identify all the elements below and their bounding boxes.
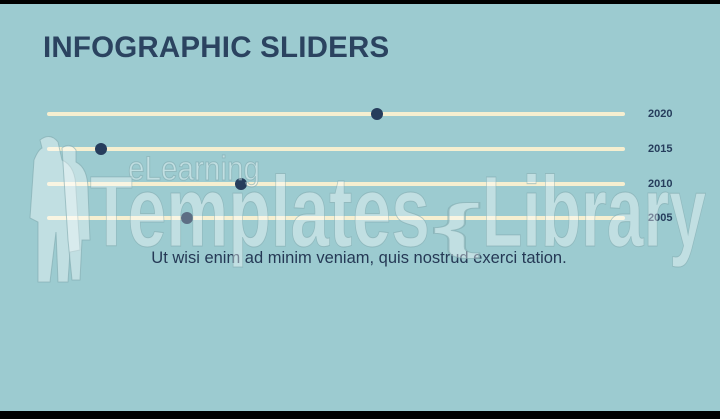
slider 2015: 2015 [648,143,672,155]
title: INFOGRAPHIC SLIDERS [43,31,389,64]
slider 2005 [47,212,672,224]
slider 2010 [47,178,672,190]
body text: Ut wisi enim ad minim veniam, quis nostrud exerci tation. [151,249,567,267]
slider 2020 [47,108,672,120]
slider 2010: 2010 [648,178,672,190]
watermark: Templates [90,156,430,268]
watermark: eLearning [128,150,260,188]
top black band [0,0,720,4]
slider 2005: 2005 [648,212,672,224]
slider 2020: 2020 [648,108,672,120]
watermark: { [432,192,482,259]
bottom black band [0,411,720,419]
slider 2015 [47,143,672,155]
